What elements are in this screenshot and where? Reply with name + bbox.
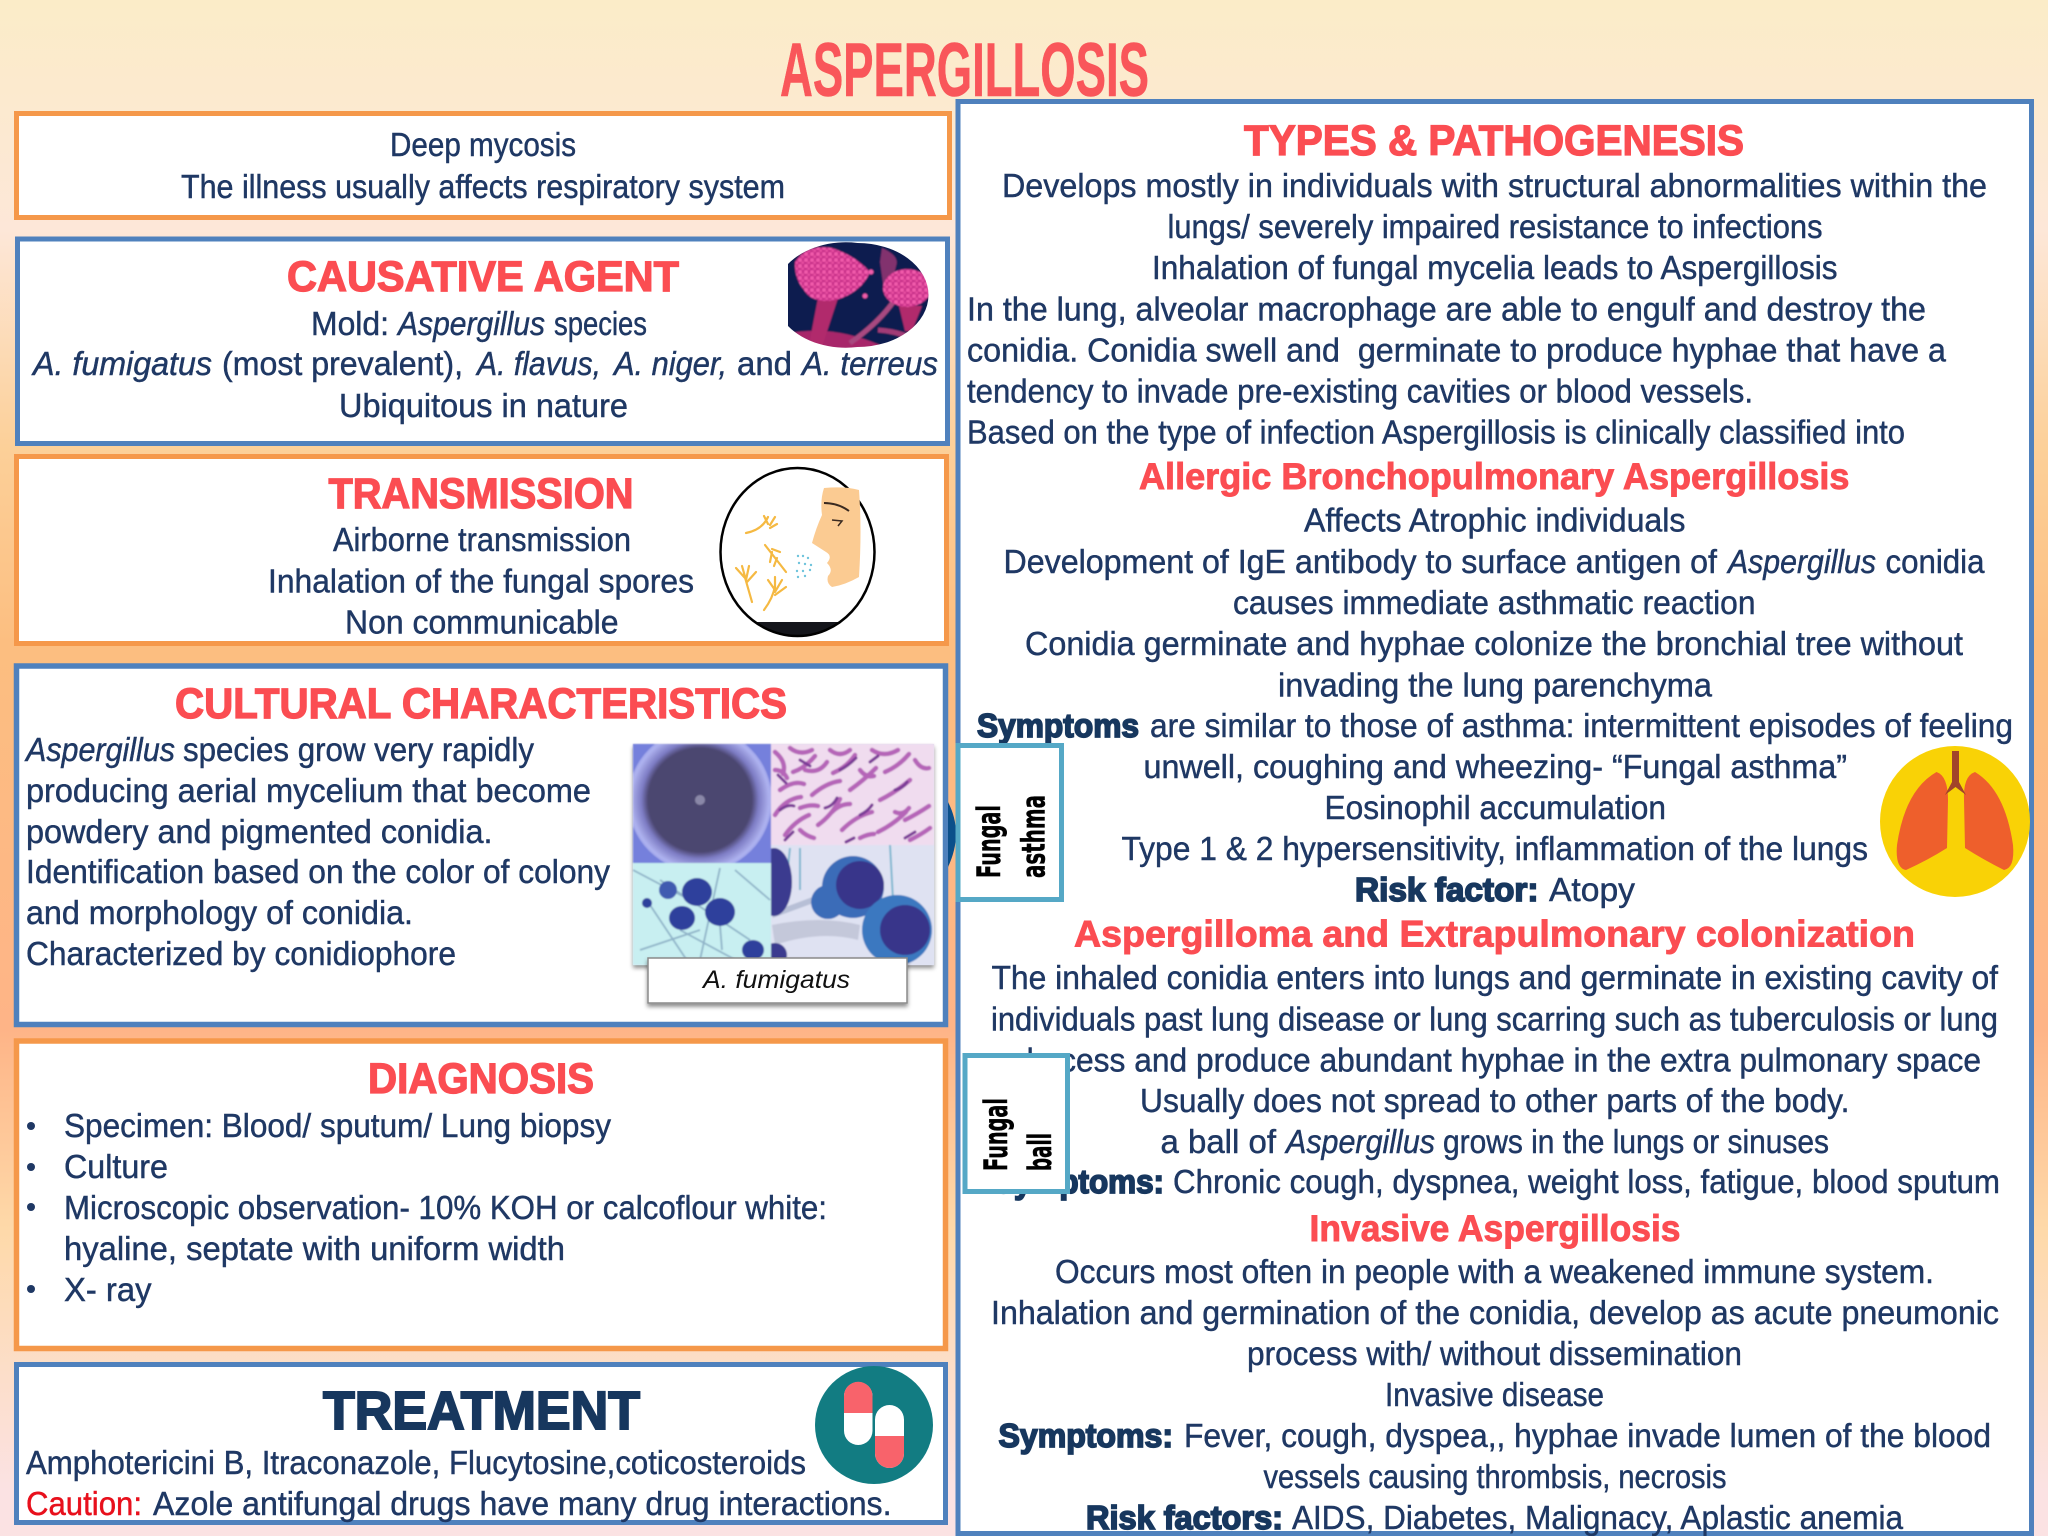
- list: diagnosis steps: Culture: [64, 1148, 168, 1185]
- heading: causative agent: CAUSATIVE AGENT: [287, 253, 679, 301]
- text block: allergic bronchopulmonary aspergillosis: Type 1 & 2 hypersensitivity, inflammation of the lungs: [1122, 830, 1868, 867]
- text block: cultural description: powdery and pigmented conidia.: [26, 813, 492, 850]
- list: diagnosis steps: Specimen: Blood/ sputum/ Lung biopsy: [64, 1107, 611, 1144]
- text block: pathogenesis: Inhalation of fungal mycelia leads to Aspergillosis: [1152, 249, 1838, 286]
- text block: allergic bronchopulmonary aspergillosis: Aspergillus: [1726, 543, 1876, 580]
- text block: causative agent: (most prevalent),: [222, 345, 463, 382]
- heading: diagnosis: DIAGNOSIS: [368, 1055, 594, 1103]
- subheading: allergic bronchopulmonary aspergillosis: Allergic Bronchopulmonary Aspergillosis: [1139, 456, 1850, 497]
- text block: pathogenesis: conidia. Conidia swell and germinate to produce hyphae that have a: [967, 332, 1947, 368]
- panel: definition: The illness usually affects respiratory system: [181, 168, 785, 205]
- text block: causative agent: species: [554, 305, 647, 342]
- text block: allergic bronchopulmonary aspergillosis: causes immediate asthmatic reaction: [1233, 584, 1756, 621]
- text block: drugs: Amphotericini B, Itraconazole, Flucytosine,coticosteroids: [26, 1444, 806, 1481]
- text block: cultural description: species grow very rapidly: [183, 731, 534, 768]
- text block: pathogenesis: tendency to invade pre-existing cavities or blood vessels.: [967, 372, 1753, 410]
- panel: diagnosis: [16, 1041, 946, 1348]
- text block: aspergilloma: [991, 959, 2000, 1200]
- text block: transmission: Airborne transmission: [333, 521, 631, 558]
- icon: aspergillus mold: [785, 240, 931, 352]
- image caption: [648, 958, 907, 1003]
- title: ASPERGILLOSIS: [780, 28, 1149, 113]
- callout: fungal asthma: [958, 746, 1062, 900]
- subheading: aspergilloma: Aspergilloma and Extrapulmonary colonization: [1074, 914, 1915, 954]
- image collage: A. fumigatus: [628, 728, 934, 967]
- text block: causative agent: A. flavus,: [475, 345, 601, 382]
- text block: transmission: Non communicable: [345, 604, 618, 640]
- heading: types and pathogenesis: TYPES & PATHOGENESIS: [1244, 117, 1744, 165]
- text block: aspergilloma: Symptoms:: [993, 1163, 1164, 1200]
- text block: cultural description: [24, 731, 610, 972]
- text block: cultural description: Identification based on the color of colony: [26, 853, 610, 890]
- text block: allergic bronchopulmonary aspergillosis: Affects Atrophic individuals: [1304, 502, 1686, 538]
- heading: treatment: TREATMENT: [323, 1381, 640, 1441]
- text block: allergic bronchopulmonary aspergillosis: are similar to those of asthma: intermittent episodes of feeling: [1150, 707, 2013, 744]
- text block: aspergilloma: abscess and produce abundant hyphae in the extra pulmonary space: [1009, 1042, 1981, 1078]
- callout: fungal asthma: asthma: [1014, 795, 1052, 878]
- text block: allergic bronchopulmonary aspergillosis: conidia: [1886, 543, 1985, 580]
- text block: aspergilloma: The inhaled conidia enters into lungs and germinate in existing cavity of: [992, 959, 1999, 996]
- panel: cultural characteristics: [16, 666, 946, 1024]
- text block: invasive aspergillosis: Occurs most often in people with a weakened immune system.: [1055, 1253, 1934, 1290]
- panel: types and pathogenesis: [958, 102, 2032, 1536]
- text block: causative agent: [31, 305, 938, 424]
- text block: allergic bronchopulmonary aspergillosis: Development of IgE antibody to surface antigen of: [1004, 543, 1718, 580]
- text block: pathogenesis: In the lung, alveolar macrophage are able to engulf and destroy the: [967, 290, 1926, 328]
- text block: aspergilloma: Usually does not spread to other parts of the body.: [1140, 1082, 1850, 1119]
- panel: definition: [16, 114, 950, 218]
- callout: fungal ball: ball: [1021, 1133, 1059, 1171]
- text block: invasive aspergillosis: process with/ without dissemination: [1247, 1335, 1742, 1372]
- text block: causative agent: and: [737, 345, 792, 382]
- text block: causative agent: A. niger,: [612, 345, 727, 382]
- text block: cultural description: Aspergillus: [24, 731, 175, 768]
- text block: causative agent: Aspergillus: [396, 305, 545, 342]
- text block: invasive aspergillosis: Fever, cough, dyspea,, hyphae invade lumen of the blood: [1184, 1417, 1991, 1454]
- text block: aspergilloma: Chronic cough, dyspnea, weight loss, fatigue, blood sputum: [1173, 1163, 2000, 1200]
- text block: invasive aspergillosis: [991, 1253, 1999, 1536]
- text block: caution: Caution:: [26, 1485, 142, 1522]
- text block: allergic bronchopulmonary aspergillosis: [977, 502, 2013, 908]
- text block: allergic bronchopulmonary aspergillosis: invading the lung parenchyma: [1278, 666, 1713, 704]
- text block: cultural description: Characterized by conidiophore: [26, 935, 456, 972]
- text block: allergic bronchopulmonary aspergillosis: Atopy: [1549, 871, 1636, 908]
- text block: allergic bronchopulmonary aspergillosis: Risk factor:: [1355, 871, 1538, 908]
- text block: causative agent: A. terreus: [800, 345, 938, 382]
- subheading: invasive aspergillosis: Invasive Aspergillosis: [1310, 1208, 1680, 1249]
- text block: invasive aspergillosis: AIDS, Diabetes, Malignacy, Aplastic anemia: [1292, 1499, 1904, 1536]
- text block: pathogenesis: Based on the type of infection Aspergillosis is clinically classified into: [967, 414, 1905, 450]
- icon: pills: [815, 1366, 933, 1484]
- text block: aspergilloma: grows in the lungs or sinuses: [1443, 1123, 1829, 1160]
- heading: transmission: TRANSMISSION: [328, 470, 634, 518]
- text block: pathogenesis: Develops mostly in individuals with structural abnormalities within the: [1002, 167, 1987, 204]
- text block: invasive aspergillosis: Inhalation and germination of the conidia, develop as acute pneumonic: [991, 1294, 1999, 1331]
- callout: fungal asthma: Fungal: [970, 805, 1008, 878]
- icon: lungs: [1880, 746, 2030, 897]
- text block: invasive aspergillosis: Symptoms:: [998, 1417, 1173, 1454]
- list: diagnosis steps: Microscopic observation- 10% KOH or calcoflour white:: [64, 1189, 827, 1226]
- text block: transmission: Inhalation of the fungal spores: [268, 562, 694, 600]
- callout: fungal ball: [965, 1056, 1068, 1192]
- text block: cultural description: and morphology of conidia.: [26, 894, 413, 931]
- text block: causative agent: Ubiquitous in nature: [339, 387, 628, 424]
- text block: transmission: [268, 521, 694, 640]
- text block: invasive aspergillosis: Risk factors:: [1086, 1499, 1283, 1536]
- icon: inhaling spores: [715, 468, 880, 642]
- panel: definition: Deep mycosis: [390, 126, 576, 163]
- text block: causative agent: Mold:: [311, 305, 389, 342]
- text block: causative agent: A. fumigatus: [31, 345, 212, 382]
- panel: treatment: [16, 1364, 946, 1522]
- text block: invasive aspergillosis: vessels causing thrombsis, necrosis: [1264, 1458, 1726, 1495]
- text block: allergic bronchopulmonary aspergillosis: unwell, coughing and wheezing- “Fungal asthma”: [1144, 748, 1847, 785]
- text block: allergic bronchopulmonary aspergillosis: Conidia germinate and hyphae colonize the bronchial tree without: [1025, 625, 1963, 662]
- decorative dark crescent: [948, 802, 956, 867]
- heading: cultural characteristics: CULTURAL CHARACTERISTICS: [175, 680, 787, 728]
- text block: aspergilloma: individuals past lung disease or lung scarring such as tuberculosis or lung: [991, 1000, 1998, 1038]
- text block: caution: Azole antifungal drugs have many drug interactions.: [153, 1485, 892, 1522]
- text block: cultural description: producing aerial mycelium that become: [26, 772, 591, 809]
- text block: allergic bronchopulmonary aspergillosis: Eosinophil accumulation: [1324, 789, 1666, 826]
- text block: pathogenesis: lungs/ severely impaired resistance to infections: [1168, 208, 1822, 245]
- text block: aspergilloma: a ball of: [1160, 1123, 1277, 1160]
- list: diagnosis steps: hyaline, septate with uniform width: [64, 1230, 565, 1267]
- list: diagnosis steps: [27, 1107, 827, 1308]
- callout: fungal ball: Fungal: [977, 1098, 1015, 1171]
- text block: aspergilloma: Aspergillus: [1284, 1123, 1435, 1160]
- text block: invasive aspergillosis: Invasive disease: [1385, 1376, 1604, 1413]
- panel: transmission: [16, 456, 946, 644]
- list: diagnosis steps: X- ray: [64, 1271, 152, 1308]
- text block: allergic bronchopulmonary aspergillosis: Symptoms: [977, 707, 1139, 744]
- text block: pathogenesis: [967, 167, 1987, 450]
- image caption: A. fumigatus: [701, 966, 850, 994]
- panel: causative agent: [18, 239, 948, 444]
